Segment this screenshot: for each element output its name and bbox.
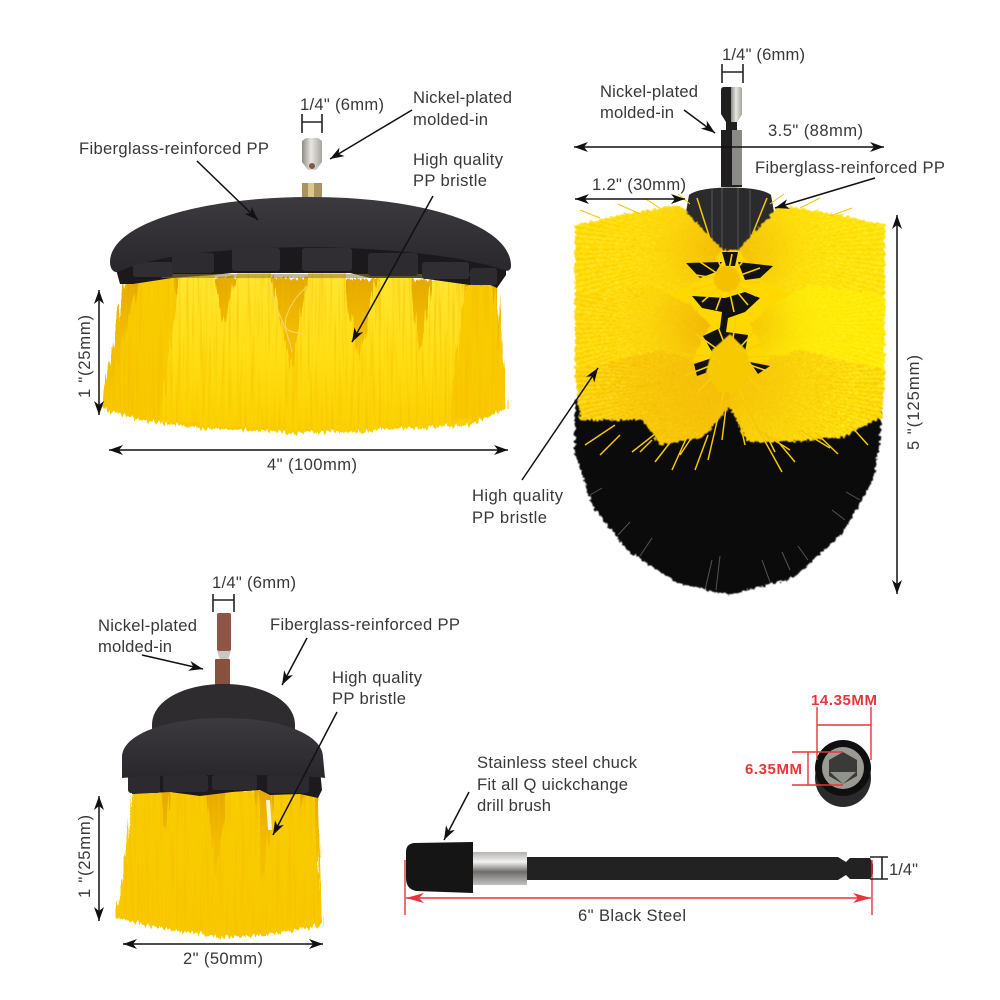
annotations: 4 inch brush: PP bristle xyxy=(413,171,487,190)
annotations: extension bar: 6" Black Steel xyxy=(578,906,686,925)
annotations: 2 inch brush xyxy=(75,573,460,968)
annotations: 4 inch brush: 1 "(25mm) xyxy=(75,315,94,398)
annotations: 5 inch brush: PP bristle xyxy=(472,508,547,527)
annotations: 4 inch brush: Nickel-plated xyxy=(413,88,512,107)
annotations: 2 inch brush: 2" (50mm) xyxy=(183,949,263,968)
annotations: socket dimensions: 6.35MM xyxy=(745,761,802,778)
annotations: 2 inch brush: molded-in xyxy=(98,637,172,656)
chuck xyxy=(406,842,473,893)
shaft xyxy=(215,613,231,685)
annotations: 4 inch brush: 1/4" (6mm) xyxy=(300,95,384,114)
annotations: 4 inch brush: Fiberglass-reinforced PP xyxy=(79,139,269,158)
annotations: 5 inch brush: 1.2" (30mm) xyxy=(592,175,686,194)
annotations: 5 inch brush: High quality xyxy=(472,486,564,505)
annotations: 4 inch brush: High quality xyxy=(413,150,504,169)
annotations: 2 inch brush: Nickel-plated xyxy=(98,616,197,635)
housing xyxy=(122,684,325,778)
annotations: 2 inch brush: High quality xyxy=(332,668,423,687)
annotations: 4 inch brush: 4" (100mm) xyxy=(267,455,357,474)
loose fibres xyxy=(269,278,309,352)
bristles xyxy=(116,790,322,938)
annotations: extension bar: 1/4" xyxy=(889,860,918,879)
bristles: yellow tufts xyxy=(102,270,507,433)
annotations: 5 inch brush: 5 "(125mm) xyxy=(904,355,923,450)
annotations: extension bar xyxy=(405,753,918,925)
annotations: 5 inch brush: Fiberglass-reinforced PP xyxy=(755,158,945,177)
annotations: 5 inch brush xyxy=(472,45,945,594)
drill extension bar xyxy=(406,842,873,893)
annotations: extension bar: drill brush xyxy=(477,796,551,815)
shaft xyxy=(302,138,322,198)
brush: 4 inch flat brush xyxy=(102,138,511,436)
annotations: 5 inch brush: 1/4" (6mm) xyxy=(722,45,805,64)
disc xyxy=(110,197,511,272)
teeth xyxy=(128,770,322,798)
annotations: 5 inch brush: Nickel-plated xyxy=(600,82,698,101)
annotations: 4 inch brush: molded-in xyxy=(413,110,488,129)
disc underside and teeth xyxy=(114,240,506,288)
socket end view xyxy=(815,740,871,807)
annotations: socket dimensions xyxy=(745,692,877,785)
annotations: extension bar: Stainless steel chuck xyxy=(477,753,638,772)
brush: tall 5 inch brush xyxy=(572,87,888,596)
central core and yellow fibre details xyxy=(580,194,868,472)
annotations: 2 inch brush: Fiberglass-reinforced PP xyxy=(270,615,460,634)
annotations: 5 inch brush: molded-in xyxy=(600,103,674,122)
annotations: extension bar: Fit all Q uickchange xyxy=(477,775,628,794)
brush: 2 inch small brush xyxy=(116,613,325,940)
annotations: 2 inch brush: 1/4" (6mm) xyxy=(212,573,296,592)
annotations: socket dimensions: 14.35MM xyxy=(811,692,877,709)
annotations: 2 inch brush: PP bristle xyxy=(332,689,406,708)
annotations: 5 inch brush: 3.5" (88mm) xyxy=(768,121,863,140)
steel collar xyxy=(473,852,527,885)
annotations: 4 inch brush xyxy=(75,88,512,474)
hex shaft xyxy=(527,857,873,880)
yellow bristles xyxy=(572,204,888,446)
annotations: 2 inch brush: 1 "(25mm) xyxy=(75,815,94,898)
black bristles, shaft and neck xyxy=(572,87,884,596)
